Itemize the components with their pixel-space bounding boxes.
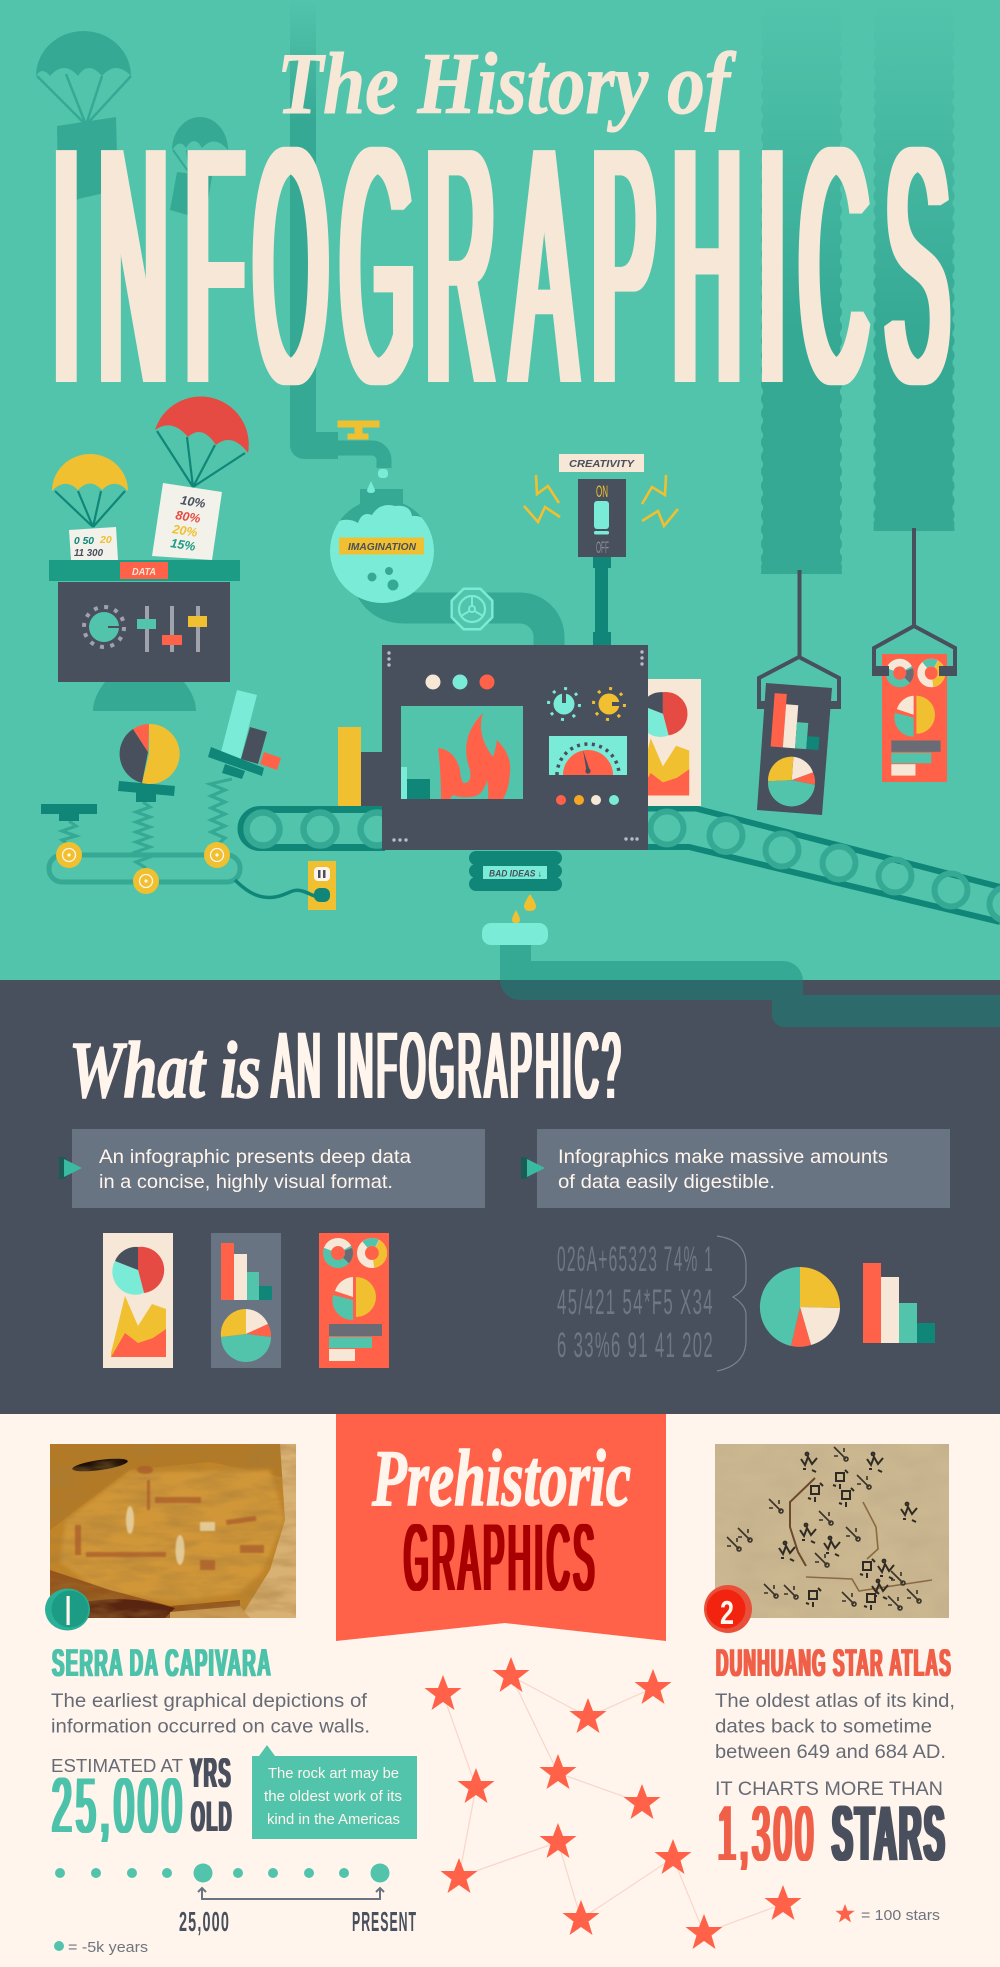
belt loop [49, 855, 240, 882]
furnace window with flame [401, 706, 523, 799]
panel: factory hero [36, 0, 1000, 945]
badge number two: 2 [720, 1594, 734, 1631]
switch box: OFF [596, 538, 609, 557]
status lights [556, 795, 619, 805]
timeline bracket arrow [198, 1888, 384, 1899]
paper note small: 20 [99, 534, 112, 546]
panel: prehistoric graphics: SERRA DA CAPIVARA [52, 1642, 272, 1685]
burner and drip [482, 894, 548, 945]
teal callout: The rock art may be [268, 1766, 399, 1782]
result pie chart [760, 1267, 840, 1347]
star legend: = 100 stars [861, 1907, 940, 1924]
panel: what is an infographic: 6 33%6 91 41 202 [557, 1326, 714, 1365]
atlas description: The oldest atlas of its kind, [715, 1690, 955, 1712]
machine lid and data label [49, 560, 240, 581]
timeline dots [55, 1864, 390, 1882]
water pipe and tap [285, 0, 384, 468]
right plate with bars [208, 690, 281, 779]
paper note large: 15% [170, 536, 196, 554]
indicator lights [426, 674, 494, 690]
brace [717, 1236, 746, 1371]
paper note small: 11 300 [74, 547, 103, 559]
result bar chart [863, 1263, 935, 1343]
left conveyor [241, 810, 394, 848]
pie on spring [120, 724, 180, 784]
poster examples [103, 1233, 389, 1368]
imagination flask [320, 469, 549, 646]
ribbon script: Prehistoric [371, 1435, 631, 1523]
lightning sparks [524, 475, 678, 526]
badge number one [45, 1588, 90, 1630]
bad ideas chute: BAD IDEAS ↓ [489, 868, 542, 878]
yellow parachute [52, 454, 128, 527]
middle plate [118, 781, 175, 802]
site description [51, 1690, 370, 1738]
panel: what is an infographic [0, 945, 1000, 1414]
age stat [51, 1749, 233, 1849]
atlas description: dates back to sometime [715, 1716, 932, 1738]
constellation lines [443, 1676, 783, 1933]
springs [62, 779, 232, 868]
paper note large: 80% [175, 508, 201, 526]
creativity label: CREATIVITY [569, 458, 635, 470]
age stat: 25,000 [52, 1761, 186, 1849]
title line: The History of: The History of [277, 36, 737, 133]
right conveyor [640, 808, 1000, 922]
age caption: ESTIMATED AT [51, 1755, 183, 1776]
red parachute [155, 396, 249, 487]
corner rivets [387, 650, 644, 842]
paper note large: 10% [180, 493, 206, 511]
star legend [835, 1904, 940, 1924]
timeline legend: = -5k years [68, 1939, 148, 1956]
teal callout [252, 1745, 417, 1839]
panel: prehistoric graphics [0, 1414, 1000, 1967]
star constellation [424, 1657, 802, 1949]
photo: cave rock art [50, 1444, 296, 1618]
atlas description: between 649 and 684 AD. [715, 1741, 946, 1763]
pressure gauge [549, 736, 627, 775]
panel: what is an infographic: 45/421 54*F5 X34 [557, 1283, 714, 1322]
poster: cream [103, 1233, 173, 1368]
constellation stars [424, 1657, 802, 1949]
ribbon heading [336, 1414, 666, 1641]
title line: INFOGRAPHICS: INFOGRAPHICS [53, 78, 949, 454]
flask body [330, 469, 434, 603]
machine lid and data label: DATA [132, 566, 156, 578]
paper note large [152, 483, 222, 560]
age unit [190, 1749, 233, 1841]
creativity label [559, 454, 644, 472]
panel: what is an infographic: 026A+65323 74% 1 [557, 1240, 714, 1279]
definition box left: An infographic presents deep data [99, 1146, 411, 1168]
badge number two [704, 1585, 752, 1633]
heading script: What is [69, 1027, 261, 1115]
creativity switch [524, 454, 678, 646]
panel: prehistoric graphics: PRESENT [352, 1906, 417, 1937]
definition box right [521, 1129, 950, 1208]
control box [58, 582, 230, 711]
dial knobs [548, 688, 624, 720]
poster: red [319, 1233, 389, 1368]
switch box: ON [596, 482, 608, 501]
teal callout: the oldest work of its [264, 1789, 402, 1805]
valve wheel [452, 589, 492, 629]
site description: The earliest graphical depictions of [51, 1690, 368, 1712]
teal callout: kind in the Americas [267, 1812, 400, 1828]
timeline labels: 25,000 [179, 1906, 230, 1937]
main machine [382, 645, 648, 850]
hanging claw two with red poster [872, 528, 957, 782]
star count caption: IT CHARTS MORE THAN [715, 1778, 943, 1800]
background accordion columns [755, 0, 960, 574]
big title [53, 36, 949, 454]
paper note small: 0 50 [74, 535, 94, 547]
definition box right: Infographics make massive amounts [558, 1146, 888, 1168]
panel: prehistoric graphics: YRS [190, 1749, 232, 1796]
wheels [56, 842, 230, 894]
raw numbers [557, 1240, 714, 1365]
poster: grey [211, 1233, 281, 1368]
definition box left [59, 1129, 485, 1208]
panel: prehistoric graphics: OLD [191, 1793, 233, 1841]
atlas description [715, 1690, 955, 1763]
hanging claw one with dark poster [757, 570, 841, 815]
yellow input block [338, 727, 382, 806]
panel: prehistoric graphics: GRAPHICS [404, 1505, 598, 1611]
gas pipe crossing into the panel [500, 945, 1000, 1027]
star count stat: 1,300 [718, 1789, 817, 1877]
bad ideas chute [469, 851, 562, 891]
switch pole [593, 557, 611, 646]
poster leaving the machine [638, 679, 701, 806]
power outlet and cord [235, 861, 336, 910]
background parachutes [36, 31, 228, 220]
site description: information occurred on cave walls. [51, 1716, 370, 1738]
definition box right: of data easily digestible. [558, 1171, 775, 1193]
section heading [69, 1013, 624, 1119]
definition box left: in a concise, highly visual format. [99, 1171, 393, 1193]
pipe to main machine [368, 583, 549, 646]
left plate [41, 804, 97, 821]
paper note large: 20% [171, 522, 198, 540]
switch box [578, 479, 626, 557]
imagination label [339, 538, 424, 554]
paper note small [69, 527, 118, 560]
timeline labels [179, 1906, 417, 1937]
photo: dunhuang star atlas [715, 1444, 949, 1618]
spring contraption [41, 690, 336, 910]
data machine with parachutes [49, 396, 249, 711]
imagination label: IMAGINATION [348, 541, 416, 553]
